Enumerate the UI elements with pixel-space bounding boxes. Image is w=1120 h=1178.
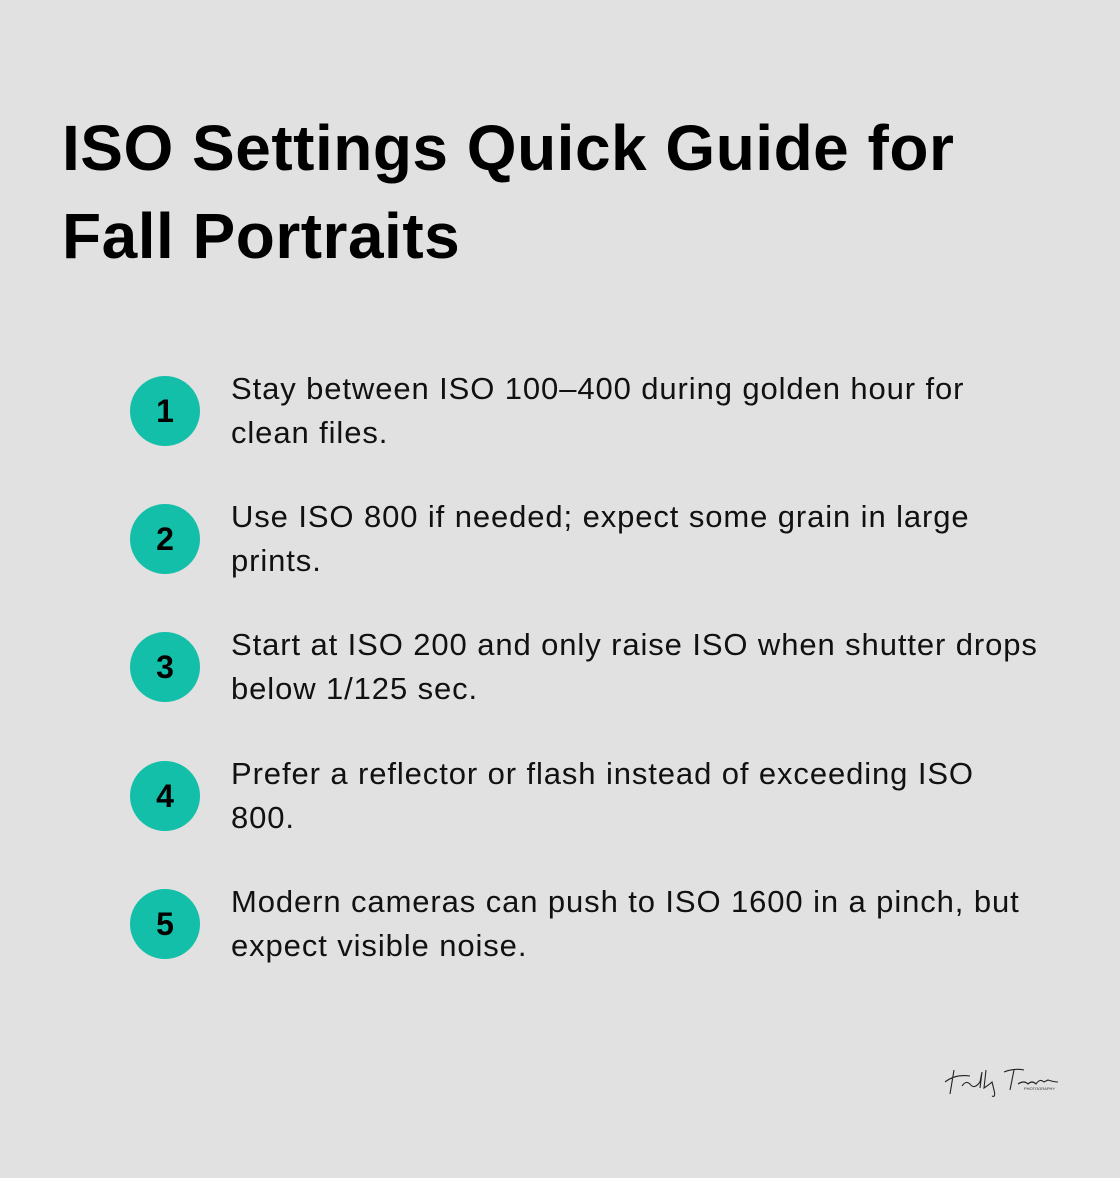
- text 4: [231, 756, 974, 835]
- text 1: Stay between ISO 100–400 during golden hour for: [231, 371, 964, 406]
- text 2: [231, 499, 970, 578]
- text 4: Prefer a reflector or flash instead of exceeding ISO: [231, 756, 974, 791]
- title: Fall Portraits: [62, 200, 460, 272]
- text 1: clean files.: [231, 415, 388, 450]
- icon: number 3: [130, 632, 200, 702]
- text 5: [231, 884, 1020, 963]
- text 3: below 1/125 sec.: [231, 671, 478, 706]
- text 5: Modern cameras can push to ISO 1600 in a pinch, but: [231, 884, 1020, 919]
- title: [62, 112, 954, 272]
- item 4: [130, 756, 974, 835]
- icon: number 1: [130, 376, 200, 446]
- text 3: [231, 627, 1038, 706]
- signature logo: [944, 1068, 1058, 1097]
- icon: number 2: [130, 504, 200, 574]
- text 5: expect visible noise.: [231, 928, 527, 963]
- icon: number 1: 1: [156, 393, 174, 429]
- item 5: [130, 884, 1020, 963]
- icon: number 3: 3: [156, 649, 174, 685]
- icon: number 5: 5: [156, 906, 174, 942]
- item 3: [130, 627, 1038, 706]
- title: ISO Settings Quick Guide for: [62, 112, 954, 184]
- text 4: 800.: [231, 800, 295, 835]
- item 2: [130, 499, 970, 578]
- text 2: Use ISO 800 if needed; expect some grain in large: [231, 499, 970, 534]
- icon: number 4: [130, 761, 200, 831]
- item 1: [130, 371, 964, 450]
- icon: number 4: 4: [156, 778, 174, 814]
- text 3: Start at ISO 200 and only raise ISO when shutter drops: [231, 627, 1038, 662]
- signature logo: PHOTOGRAPHY: [1024, 1086, 1055, 1091]
- text 1: [231, 371, 964, 450]
- text 2: prints.: [231, 543, 322, 578]
- icon: number 2: 2: [156, 521, 174, 557]
- icon: number 5: [130, 889, 200, 959]
